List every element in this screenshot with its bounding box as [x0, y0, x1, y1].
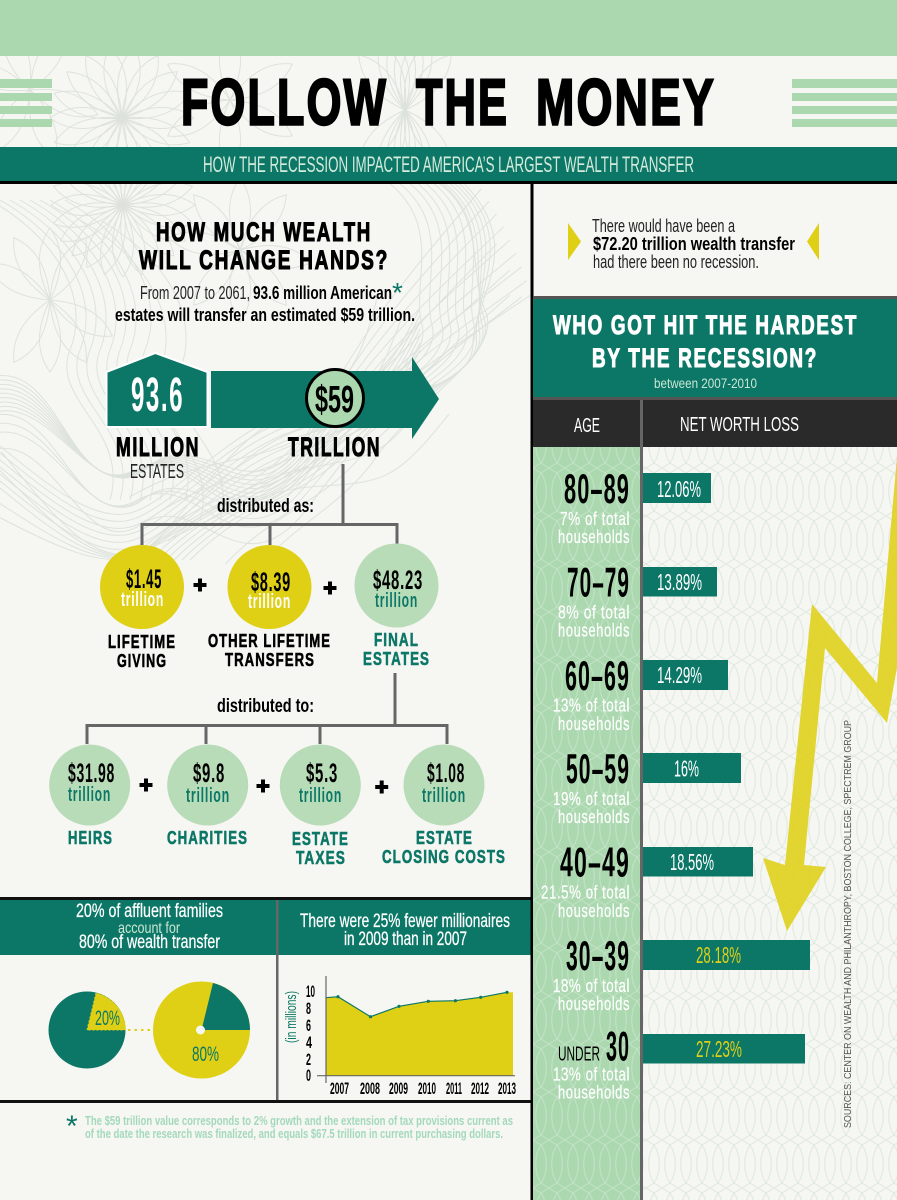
area chart: 8 — [306, 999, 311, 1018]
zigzag decline arrow — [763, 457, 897, 931]
row: 70-79 — [558, 558, 717, 640]
row: 50-59 — [553, 745, 741, 827]
heading: HOW MUCH WEALTH — [156, 217, 372, 247]
row: 30-39: 18% of total — [553, 976, 630, 996]
row: 50-59: 16% — [674, 756, 699, 782]
area chart: 6 — [306, 1016, 311, 1035]
connector tree: distributed as — [142, 464, 397, 545]
circle: heirs: trillion — [68, 784, 111, 806]
row: under 30: 13% of total — [553, 1064, 630, 1084]
circle: estate closing costs: ESTATE — [416, 828, 473, 848]
column divider — [530, 184, 534, 1200]
panel: millionaires: 2013 — [498, 1079, 516, 1098]
row: 30-39: 28.18% — [696, 942, 741, 968]
row: 50-59: 50–59 — [566, 745, 630, 792]
arrow: 59 trillion: TRILLION — [288, 432, 381, 462]
title: THE — [416, 66, 509, 138]
panel text — [76, 901, 223, 953]
intro text: From 2007 to 2061, — [140, 283, 250, 303]
area chart: 2009 — [389, 1079, 408, 1098]
area chart: 4 — [306, 1033, 312, 1052]
row: 50-59: households — [558, 807, 630, 827]
row: 80-89: households — [558, 527, 630, 547]
row: 80-89: 80–89 — [564, 465, 630, 512]
icon: plus — [140, 778, 152, 792]
row: 70-79: 13.89% — [657, 569, 702, 595]
circle: heirs: $31.98 — [68, 758, 115, 788]
intro text: 93.6 million American — [253, 283, 392, 303]
heading: WILL CHANGE HANDS? — [139, 245, 389, 275]
area chart: 10 — [306, 982, 315, 1001]
panel text: in 2009 than in 2007 — [344, 929, 467, 950]
connector tree: distributed to: distributed to: — [217, 696, 314, 717]
table header: NET WORTH LOSS — [680, 414, 799, 436]
icon: plus — [324, 582, 336, 594]
panel: millionaires — [276, 900, 531, 1098]
row: 40-49 — [541, 838, 753, 921]
panel rules — [0, 897, 531, 1103]
circle: lifetime giving — [100, 545, 184, 671]
row: under 30: households — [558, 1082, 630, 1102]
row: under 30 — [553, 1022, 805, 1102]
circle: charities: CHARITIES — [167, 828, 248, 848]
circle: heirs: HEIRS — [68, 828, 113, 848]
circle: estate taxes — [280, 744, 361, 868]
footnote: of the date the research was finalized, and equals $67.5 trillion in current purchasing dollars. — [85, 1127, 503, 1141]
pie chart: 80 percent: 80% — [192, 1043, 219, 1066]
chart background pattern — [643, 447, 897, 1200]
circle: lifetime giving: trillion — [121, 589, 164, 611]
panel: who got hit heading: between 2007-2010 — [654, 375, 757, 391]
circle: estate taxes: TAXES — [296, 848, 346, 868]
panel text: There were 25% fewer millionaires — [300, 911, 510, 932]
footnote: * — [66, 1110, 78, 1143]
house: 93.6 million estates: MILLION — [116, 432, 200, 462]
circle: estate closing costs: CLOSING COSTS — [382, 847, 506, 867]
row: 80-89: 7% of total — [560, 509, 630, 529]
guilloche banknote background: header — [0, 56, 452, 147]
circle: final estates: FINAL — [374, 630, 419, 650]
asterisk: * — [392, 277, 403, 308]
icon: plus — [194, 578, 206, 592]
circle: other lifetime transfers: OTHER LIFETIME — [208, 631, 331, 651]
guilloche banknote background: main panel — [0, 184, 530, 564]
circle: lifetime giving: GIVING — [117, 651, 167, 671]
table header: AGE — [574, 415, 600, 437]
icon: plus — [375, 780, 388, 794]
table header — [533, 400, 897, 447]
circle: heirs — [49, 744, 130, 848]
circle: other lifetime transfers: TRANSFERS — [225, 650, 315, 670]
circle: other lifetime transfers — [208, 545, 331, 670]
area chart: 2012 — [471, 1079, 489, 1098]
house: 93.6 million estates — [106, 353, 208, 483]
callout: 72.20 trillion — [568, 216, 819, 272]
circle: lifetime giving: LIFETIME — [108, 632, 176, 652]
area chart: (in millions) — [283, 991, 300, 1043]
pie chart: 20 percent — [48, 992, 126, 1068]
row: 70-79: 8% of total — [558, 602, 630, 622]
row: 40-49: 40–49 — [560, 838, 630, 886]
row: 30-39: households — [558, 994, 630, 1014]
circle: estate closing costs: trillion — [422, 785, 466, 807]
pie chart: 80 percent — [153, 982, 250, 1078]
row: 60-69: 13% of total — [553, 696, 630, 716]
footnote — [66, 1110, 513, 1143]
row: 40-49: 18.56% — [670, 849, 714, 875]
circle: estate closing costs — [382, 744, 506, 867]
age column background — [533, 447, 640, 1200]
header and column divider — [640, 400, 643, 1200]
subtitle band — [0, 147, 897, 181]
panel text — [300, 911, 510, 950]
panel text: 20% of affluent families — [76, 901, 223, 922]
circle: final estates: $48.23 — [373, 565, 423, 595]
circle: estate taxes: ESTATE — [292, 829, 349, 849]
circle: other lifetime transfers: $8.39 — [251, 567, 291, 597]
row: 80-89: 12.06% — [657, 476, 701, 502]
house: 93.6 million estates: ESTATES — [130, 461, 184, 483]
title: MONEY — [536, 66, 716, 138]
circle: charities: trillion — [186, 785, 230, 807]
pie chart: 20 percent: 20% — [95, 1007, 120, 1030]
title — [181, 66, 716, 138]
row: 70-79: households — [558, 620, 630, 640]
row: 70-79: 70–79 — [567, 558, 630, 606]
circle: charities: $9.8 — [193, 758, 225, 788]
area chart: 0 — [306, 1066, 311, 1085]
top band — [0, 0, 897, 56]
house: 93.6 million estates: 93.6 — [131, 369, 184, 422]
circle: final estates — [354, 544, 438, 669]
icon: plus — [256, 780, 270, 792]
area chart — [283, 976, 516, 1098]
connector tree: distributed to — [87, 673, 447, 744]
row: under 30: 27.23% — [696, 1036, 742, 1062]
circle: final estates: ESTATES — [363, 649, 430, 669]
circle: final estates: trillion — [375, 590, 418, 612]
row: 30-39: 30–39 — [566, 932, 630, 979]
row: 50-59: 19% of total — [553, 789, 630, 809]
footnote: The $59 trillion value corresponds to 2% growth and the extension of tax provisions current as — [85, 1114, 513, 1128]
left decorative stripes — [0, 79, 52, 127]
row: 30-39 — [553, 932, 810, 1014]
circle: other lifetime transfers: trillion — [248, 591, 291, 613]
circle: lifetime giving: $1.45 — [126, 564, 162, 594]
circle: estate closing costs: $1.08 — [427, 758, 465, 788]
area chart: 2010 — [418, 1079, 436, 1098]
area chart: 2007 — [330, 1079, 349, 1098]
right decorative stripes — [792, 79, 897, 127]
row: under 30: 30 — [606, 1022, 630, 1070]
row: 80-89 — [558, 465, 711, 547]
area chart: 2 — [306, 1050, 311, 1069]
panel text: account for — [118, 920, 181, 937]
row: 60-69: 14.29% — [657, 662, 702, 688]
row: 40-49: 21.5% of total — [541, 882, 630, 902]
circle: charities — [167, 744, 248, 848]
area chart: 2011 — [446, 1079, 462, 1098]
heading — [139, 217, 389, 275]
panel: who got hit heading — [533, 296, 897, 400]
panel: affluent families — [0, 900, 276, 1078]
row: under 30: UNDER — [558, 1044, 600, 1066]
row: 40-49: households — [558, 901, 630, 921]
intro text — [115, 283, 415, 325]
circle: estate taxes: trillion — [299, 785, 342, 807]
horizontal rule under band — [0, 181, 897, 184]
arrow: 59 trillion — [211, 357, 439, 462]
area chart: 2008 — [360, 1079, 380, 1098]
panel: how much wealth heading — [115, 217, 415, 325]
panel text: 80% of wealth transfer — [79, 932, 221, 953]
connector tree: distributed as: distributed as: — [217, 496, 314, 517]
row: 60-69: 60–69 — [565, 652, 630, 699]
callout: 72.20 trillion: There would have been a — [592, 216, 736, 236]
row: 60-69: households — [558, 714, 630, 734]
callout: 72.20 trillion: $72.20 trillion wealth transfer — [593, 234, 795, 254]
circle: estate taxes: $5.3 — [306, 758, 338, 788]
sources: SOURCES: CENTER ON WEALTH AND PHILANTHROPY, BOSTON COLLEGE, SPECTREM GROUP — [842, 720, 854, 1128]
row: 60-69 — [553, 652, 728, 734]
dotted connector — [128, 1029, 151, 1031]
intro text: estates will transfer an estimated $59 trillion. — [115, 305, 415, 325]
callout: 72.20 trillion: had there been no recession. — [593, 252, 759, 272]
arrow: 59 trillion: $59 — [315, 379, 354, 421]
title: FOLLOW — [181, 66, 388, 138]
